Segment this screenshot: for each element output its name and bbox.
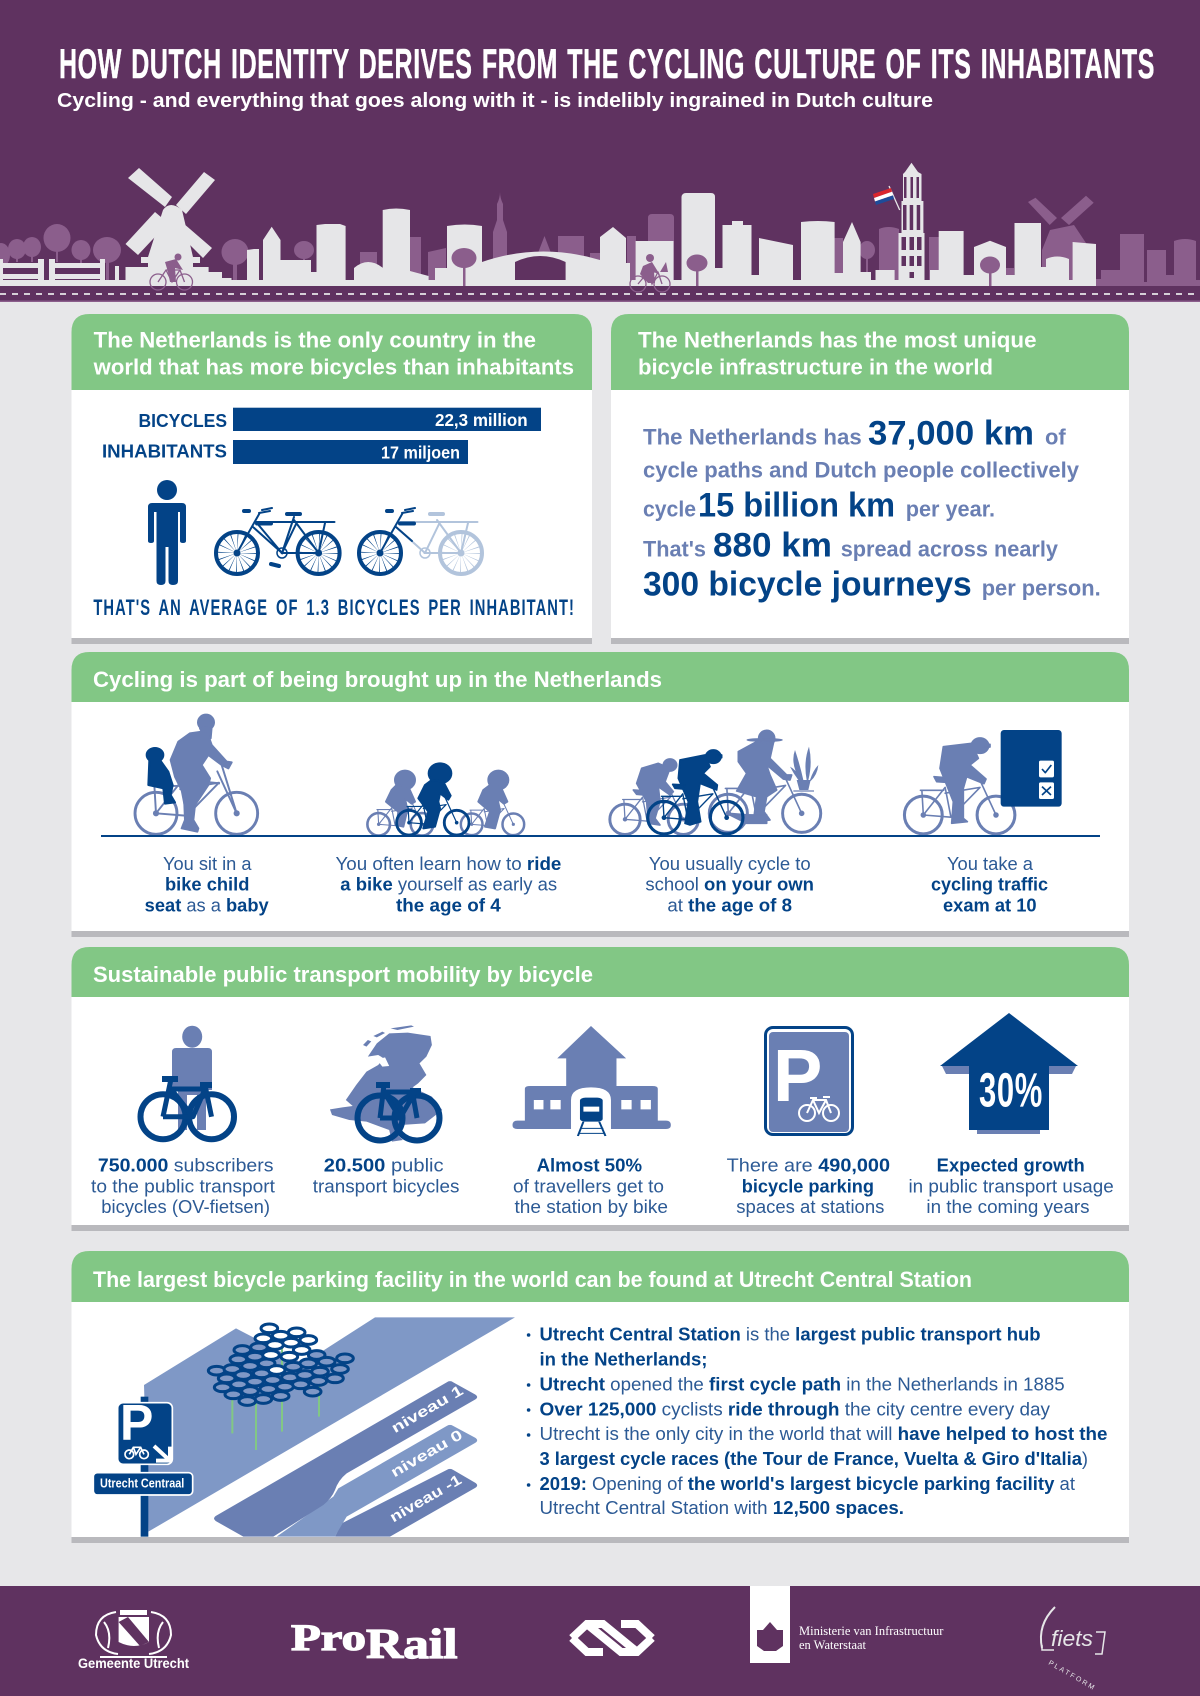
captions row: Almost 50% [537, 1156, 642, 1176]
logo: ProRail [291, 1618, 458, 1668]
heading: The Netherlands has the most unique [638, 328, 1036, 352]
caption: baby seat: You sit in a [163, 854, 252, 874]
panel: bicycle infrastructure [611, 314, 1129, 644]
bike rack grid [208, 1343, 353, 1405]
icon: Dutch flag [873, 186, 900, 210]
logo: NS [572, 1624, 652, 1652]
bullet list: Utrecht Central Station is the largest public transport hub [540, 1325, 1041, 1345]
statistics text: cycle [643, 497, 696, 522]
statistics text: per person. [982, 576, 1101, 601]
captions row: There are 490,000 [727, 1156, 890, 1176]
logo: Fiets platform: PLATFORM [1047, 1660, 1097, 1693]
caption: age of 8: school on your own [645, 875, 814, 895]
icon: fence [0, 259, 105, 281]
ramp: niveau 1: niveau 1 [389, 1383, 466, 1437]
logo: Ministerie van Infrastructuur en Waterstaat: en Waterstaat [799, 1637, 866, 1652]
logo: Ministerie van Infrastructuur en Waterstaat: Ministerie van Infrastructuur [799, 1623, 944, 1638]
icon: windmill [126, 168, 232, 281]
ramp: niveau -1 [335, 1469, 477, 1537]
bar chart: 22,3 million [435, 410, 528, 430]
illustration: children learning to ride [367, 763, 524, 836]
bullet list: Utrecht is the only city in the world that will have helped to host the [540, 1424, 1108, 1444]
captions row: the station by bike [514, 1197, 668, 1217]
floor plane [144, 1317, 515, 1532]
icon: 0.3 bicycle [359, 508, 482, 574]
heading: The Netherlands is the only country in the [94, 328, 536, 352]
statistics text: 15 billion km [698, 487, 895, 525]
caption: baby seat: bike child [165, 875, 249, 895]
statistics text: The Netherlands has [643, 424, 862, 449]
illustration: cycling to school [610, 730, 821, 834]
bullet list: 2019: Opening of the world's largest bicycle parking facility at [540, 1474, 1075, 1494]
logo: Fiets platform [1041, 1607, 1105, 1693]
green columns [232, 1347, 319, 1450]
ramp: niveau 1 [214, 1381, 477, 1537]
trees [0, 224, 875, 280]
captions row: in public transport usage [908, 1177, 1114, 1197]
captions row: Expected growth [937, 1156, 1085, 1176]
captions row: of travellers get to [513, 1177, 664, 1197]
tagline: THAT'S AN AVERAGE OF 1.3 BICYCLES PER INHABITANT! [93, 595, 575, 620]
icon: station [512, 1026, 671, 1136]
caption: exam at 10: You take a [947, 854, 1034, 874]
caption: exam at 10 [931, 854, 1048, 916]
captions row: bicycles (OV-fietsen) [101, 1197, 270, 1217]
bridge arch [515, 256, 566, 280]
icon: Netherlands map with bike [330, 1025, 442, 1142]
bar chart [102, 408, 541, 464]
captions row [91, 1156, 1114, 1217]
bullet list: Utrecht opened the first cycle path in the Netherlands in 1885 [540, 1375, 1065, 1395]
sign post: Utrecht Centraal [100, 1476, 184, 1491]
bar chart: INHABITANTS [102, 441, 227, 462]
bullet list: Over 125,000 cyclists ride through the city centre every day [540, 1400, 1050, 1420]
statistics text: 37,000 km [868, 414, 1034, 452]
panel: sustainable public transport [72, 947, 1129, 1231]
icon: parking sign [764, 1026, 854, 1136]
panel: brought up cycling [72, 652, 1129, 937]
skyline foreground layer [0, 193, 1096, 286]
captions row: bicycle parking [742, 1177, 874, 1197]
panel: bicycle infrastructure: bicycle infrastructure in the world [638, 354, 993, 380]
captions row: in the coming years [926, 1197, 1090, 1217]
statistics text: per year. [906, 497, 995, 522]
captions row: 20.500 public [324, 1156, 444, 1176]
ramp: niveau 0 [277, 1425, 477, 1537]
icon: person [148, 480, 186, 585]
statistics text [643, 414, 1101, 604]
caption: age of 4: You often learn how to ride [336, 854, 561, 874]
caption: age of 4 [336, 854, 561, 916]
icon: parking sign: P [773, 1034, 822, 1117]
caption: exam at 10: exam at 10 [943, 896, 1037, 916]
icon: cyclist on road right [630, 254, 670, 292]
icon: growth arrow [940, 1013, 1078, 1134]
icon: exam sheet [1001, 730, 1062, 807]
panel: largest bicycle parking [72, 1251, 1129, 1543]
heading: Sustainable public transport mobility by bicycle [93, 962, 593, 987]
captions row: spaces at stations [736, 1197, 884, 1217]
caption: age of 4: the age of 4 [396, 896, 501, 916]
ramp: niveau -1: niveau -1 [387, 1472, 465, 1526]
logo: Ministerie van Infrastructuur en Waterstaat [750, 1586, 944, 1663]
statistics text: spread across nearly [841, 537, 1058, 562]
panel: more bicycles than inhabitants: world that has more bicycles than inhabitants [93, 354, 574, 380]
statistics text: of [1045, 424, 1066, 449]
caption: baby seat [145, 854, 269, 916]
icon: cyclist on road left [150, 254, 192, 290]
bar chart: BICYCLES [138, 410, 227, 431]
bullet list: in the Netherlands; [540, 1350, 708, 1370]
caption: exam at 10: cycling traffic [931, 875, 1048, 895]
ground line [101, 835, 1100, 837]
sign post: P [120, 1394, 153, 1450]
sign post [93, 1394, 193, 1537]
illustration: cycling exam [904, 730, 1062, 834]
captions row: transport bicycles [313, 1177, 459, 1197]
bullet list: 3 largest cycle races (the Tour de France, Vuelta & Giro d'Italia ) [540, 1449, 1088, 1469]
statistics text: That's [643, 537, 706, 562]
icon: Dom tower [898, 163, 924, 280]
statistics text: cycle paths and Dutch people collectively [643, 457, 1079, 482]
bar chart: 17 miljoen [381, 443, 460, 463]
logo: Gemeente Utrecht: Gemeente Utrecht [78, 1655, 189, 1671]
caption: age of 8 [645, 854, 814, 916]
skyline background layer [0, 192, 1200, 286]
background windmill [1028, 196, 1094, 280]
caption: age of 4: a bike yourself as early as [340, 875, 557, 895]
icon: person with public bike [140, 1026, 234, 1139]
logo: ProRail: Rail [366, 1622, 458, 1668]
logo: ProRail: Pro [291, 1618, 366, 1659]
road [0, 294, 1200, 302]
heading: Cycling is part of being brought up in the Netherlands [93, 667, 662, 692]
illustration: parking levels [93, 1317, 515, 1537]
statistics text: 880 km [713, 527, 832, 565]
footer [0, 1586, 1200, 1696]
ramp: niveau 0: niveau 0 [388, 1427, 466, 1481]
bullet list [527, 1325, 1108, 1518]
foreground trees [452, 248, 1000, 286]
heading: The largest bicycle parking facility in the world can be found at Utrecht Central Station [93, 1267, 972, 1292]
logo: Fiets platform: fiets [1051, 1626, 1093, 1651]
bullet list: Utrecht Central Station with 12,500 spaces. [540, 1498, 904, 1518]
panel: more bicycles than inhabitants [72, 314, 592, 644]
captions row: to the public transport [91, 1177, 275, 1197]
caption: baby seat: seat as a baby [145, 896, 269, 916]
statistics text: 300 bicycle journeys [643, 566, 972, 604]
subtitle: Cycling - and everything that goes along with it - is indelibly ingrained in Dutch culture [57, 89, 933, 112]
captions row: 750.000 subscribers [98, 1156, 274, 1176]
icon: bicycle [216, 508, 340, 574]
caption: age of 8: at the age of 8 [667, 896, 792, 916]
caption: age of 8: You usually cycle to [649, 854, 811, 874]
illustration: father with baby [135, 715, 258, 834]
icon: growth arrow: 30% [979, 1065, 1043, 1118]
logo: Gemeente Utrecht [78, 1610, 189, 1671]
header banner [0, 0, 1200, 302]
